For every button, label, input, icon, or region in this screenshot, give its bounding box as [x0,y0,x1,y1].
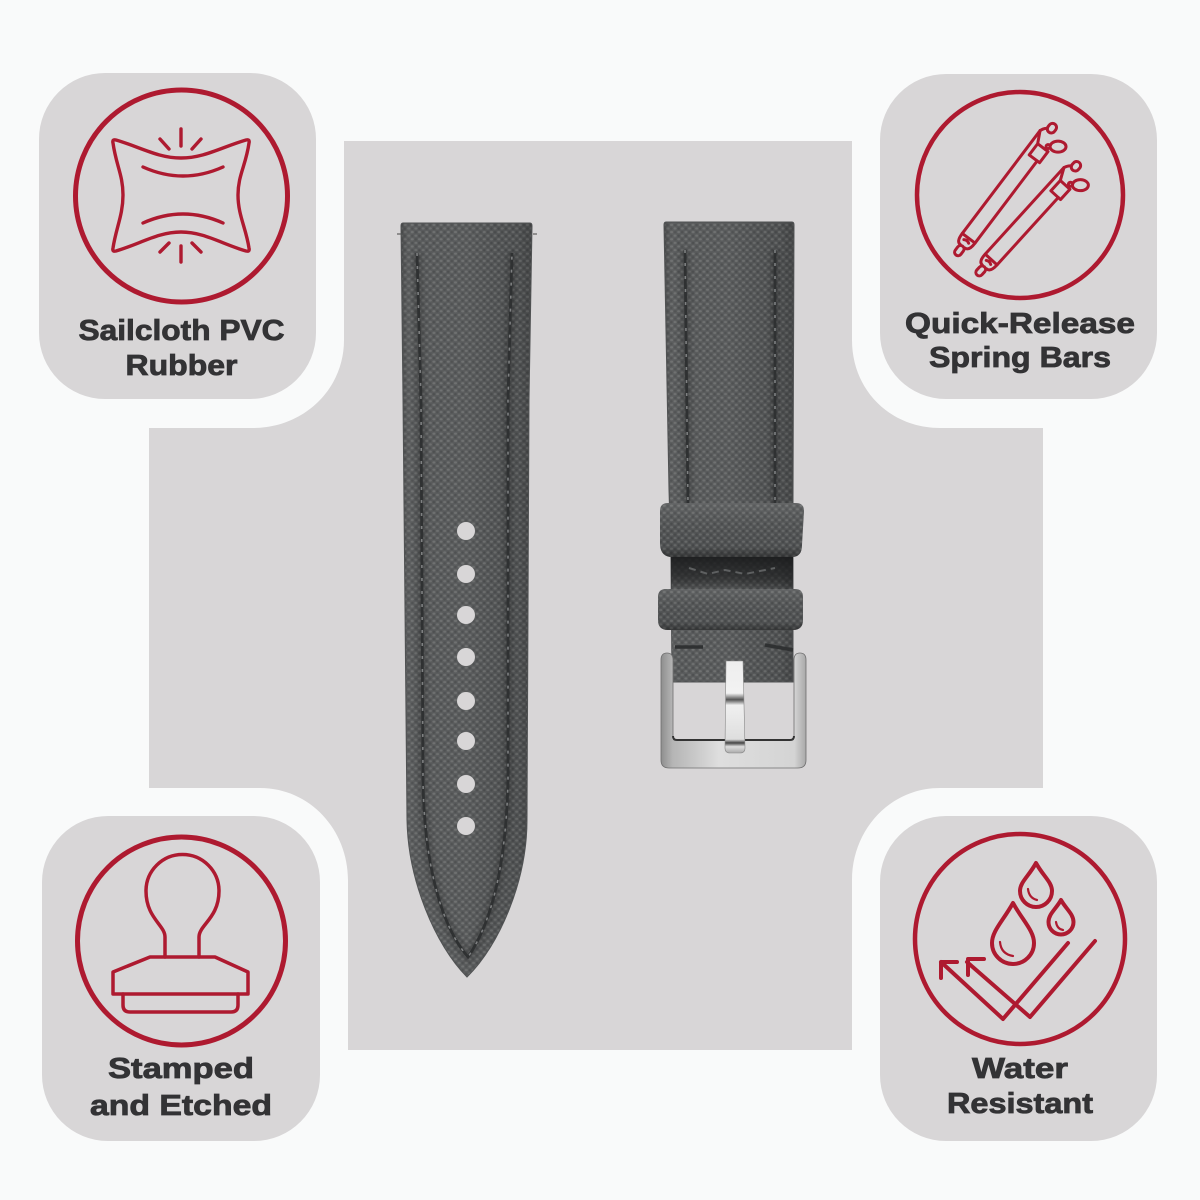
icon: stamp [78,837,286,1045]
label: Spring Bars [929,342,1111,374]
label: Sailcloth PVC [78,315,285,347]
strap holes [457,522,475,835]
icon: water drops and arrows [915,834,1125,1044]
label [905,308,1135,374]
short strap stitching [685,250,775,505]
label: Resistant [947,1088,1093,1120]
label: Water [972,1053,1068,1085]
short watch strap with buckle [658,222,806,768]
label: Quick-Release [905,308,1135,340]
label: Stamped [108,1053,254,1085]
card: Stamped and Etched [42,816,320,1141]
label [78,315,285,382]
buckle [661,653,806,768]
label [947,1053,1093,1120]
buckle tongue [725,661,745,753]
keeper loop 2 [658,589,803,630]
keeper loop 1 [660,503,804,557]
card: Quick-Release Spring Bars [880,74,1157,399]
card: Sailcloth PVC Rubber [39,73,316,399]
icon: spring bars [917,92,1123,298]
background panel [149,141,1043,1050]
card: Water Resistant [880,816,1157,1141]
long watch strap [397,223,537,977]
strap stitching [417,253,512,957]
label: and Etched [90,1090,272,1122]
shadow between keepers [671,555,793,590]
label [90,1053,272,1122]
icon: stretched sailcloth [76,90,288,302]
label: Rubber [126,350,238,382]
